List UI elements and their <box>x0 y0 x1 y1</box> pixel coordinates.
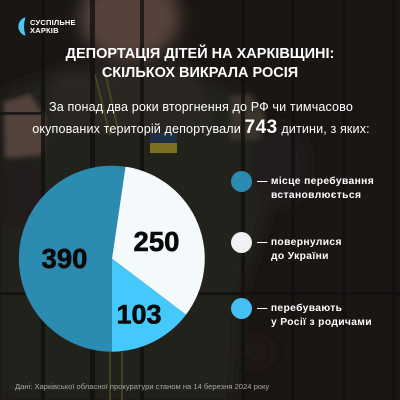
legend label <box>257 303 372 328</box>
legend dot <box>231 232 252 253</box>
value: 103: 103 <box>116 300 162 330</box>
legend label <box>257 176 374 200</box>
legend label: — повернулися <box>257 237 342 248</box>
logo text: ХАРКІВ <box>30 26 59 35</box>
legend label: — місце перебування <box>257 176 374 187</box>
flag patch <box>150 133 177 143</box>
pie chart <box>18 166 205 352</box>
slice: 390 <box>19 166 126 352</box>
icon: logo crescent <box>18 17 26 36</box>
slice: 103 <box>112 259 186 352</box>
legend label <box>257 237 342 262</box>
logo text: СУСПІЛЬНЕ <box>30 18 76 27</box>
legend dot <box>231 298 252 319</box>
source note: Дані: Харківської обласної прокуратури станом на 14 березня 2024 року <box>15 382 269 391</box>
legend label: до України <box>271 250 329 262</box>
title: ДЕПОРТАЦІЯ ДІТЕЙ НА ХАРКІВЩИНІ: <box>66 46 334 62</box>
legend label: — перебувають <box>257 303 342 314</box>
value: 250: 250 <box>134 226 179 257</box>
legend item: returned to Ukraine <box>231 232 342 262</box>
slice: 250 <box>112 167 205 315</box>
logo text <box>30 18 76 35</box>
legend dot <box>231 171 252 192</box>
intro text: За понад два роки вторгнення до РФ чи тимчасово <box>49 100 353 114</box>
legend item: in Russia with relatives <box>231 298 372 328</box>
intro text: окупованих територій депортували 743 дитини, з яких: <box>32 117 370 138</box>
legend item: location being established <box>231 171 374 200</box>
intro text <box>32 100 370 138</box>
title: СКІЛЬКОХ ВИКРАЛА РОСІЯ <box>102 65 298 81</box>
logo: Suspilne Kharkiv <box>18 17 76 36</box>
title <box>66 44 334 81</box>
value: 390: 390 <box>42 243 87 274</box>
legend label: у Росії з родичами <box>271 316 372 328</box>
legend label: встановлюється <box>271 190 361 200</box>
